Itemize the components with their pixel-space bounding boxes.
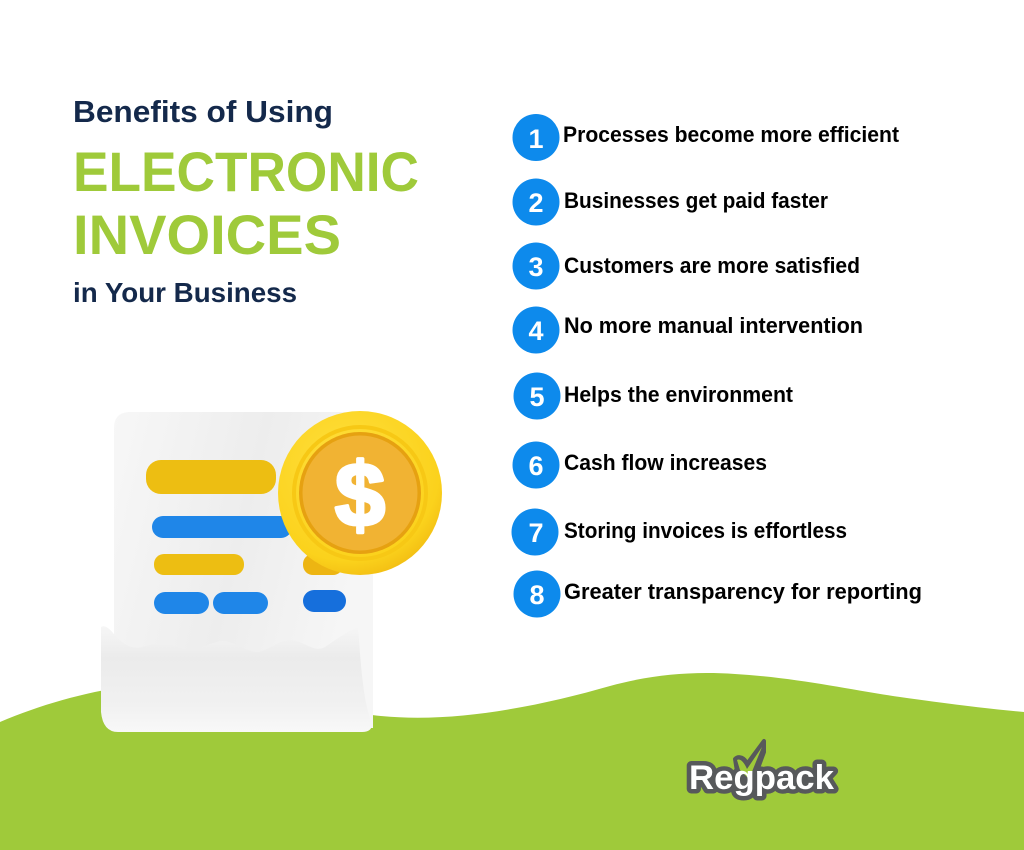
item 4: 4 [528,316,544,346]
green wave footer [0,673,1024,850]
benefits list [512,114,922,618]
item 6: Cash flow increases [564,450,767,475]
item 5 [514,372,794,420]
item 2: 2 [528,188,544,218]
item 5: 5 [529,382,545,412]
coin inner ring [299,432,421,554]
coin [278,411,442,575]
coin rim [278,411,442,575]
bar: yellow short [154,554,244,575]
item 8: 8 [529,580,545,610]
item 3: Customers are more satisfied [564,253,860,278]
item 1: 1 [528,124,544,154]
bar: yellow header [146,460,276,494]
item 6 [512,442,767,488]
dollar sign: $ [335,446,385,546]
bar: blue pill 2 [213,592,268,614]
title line: INVOICES: INVOICES [73,203,341,266]
item 8: Greater transparency for reporting [564,579,922,604]
item 4: No more manual intervention [564,313,863,338]
bar: blue pill 3 [303,590,346,612]
item 2 [512,178,828,226]
logo check mark green inner [737,747,762,779]
bar: blue line [152,516,292,538]
icon: invoice receipt with coin [101,411,442,732]
item 5: Helps the environment [564,382,794,407]
item 2: Businesses get paid faster [564,188,828,213]
bar: blue pill 1 [154,592,209,614]
title line: in Your Business: in Your Business [73,277,297,308]
item 6: 6 [528,451,544,481]
item 7 [512,508,847,556]
item 4 [512,306,863,354]
coin face [302,436,418,550]
logo text: Regpack [689,759,834,797]
item 3 [512,242,860,290]
title [73,94,419,308]
item 7: 7 [528,518,544,548]
item 1 [512,114,900,161]
coin rim shade [294,427,426,559]
item 7: Storing invoices is effortless [564,518,847,543]
receipt paper [114,412,373,728]
bar: yellow right [303,554,343,575]
item 8 [514,570,922,618]
logo text outline: Regpack [689,759,834,797]
title line: ELECTRONIC: ELECTRONIC [73,140,419,203]
item 3: 3 [528,252,544,282]
item 1: Processes become more efficient [563,122,900,147]
logo check mark outline [735,741,764,790]
receipt roll with torn edge [101,626,372,732]
title line: Benefits of Using: Benefits of Using [73,94,333,129]
logo: Regpack [689,741,834,797]
